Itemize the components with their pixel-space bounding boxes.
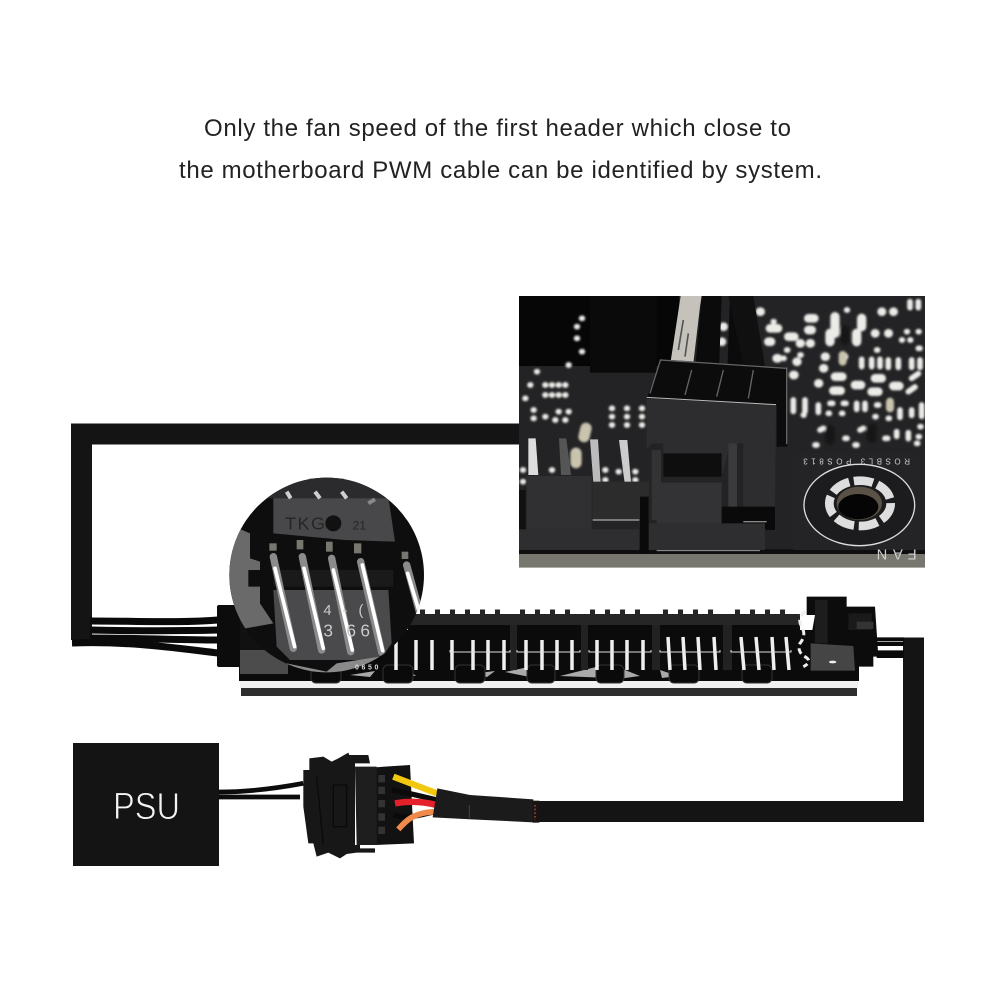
board: noise base strip: [241, 687, 857, 696]
plug grey face: [811, 643, 855, 671]
lens: board text: 4-(: [323, 603, 363, 619]
board: header outline marks: [450, 650, 791, 652]
title: [179, 115, 822, 184]
board: white edge strip: [240, 680, 858, 688]
wires to PSU: [219, 783, 303, 797]
cable: motherboard to hub: [82, 434, 519, 640]
lens: pin shoulders: [269, 540, 408, 559]
board: bottom tabs: [311, 665, 772, 683]
lens: connector top: [273, 497, 395, 542]
magnified header lens: [227, 477, 427, 677]
PSU box: [73, 743, 219, 866]
yellow wire: [393, 777, 437, 793]
title: the motherboard PWM cable can be identified by system.: [179, 157, 822, 184]
connector: left fan header: [519, 476, 649, 550]
lens: board text: [324, 604, 370, 636]
pcb components: [523, 302, 922, 482]
board: silver solder patches: [350, 666, 678, 679]
red wire: [395, 802, 437, 805]
lens: header markings: 21: [353, 518, 366, 532]
pcb silk labels: FAN: [877, 545, 917, 561]
board: header shrouds and teeth: [408, 612, 800, 670]
wires: left 4-pin bundle: [72, 620, 218, 653]
lens: grey side wall: [229, 530, 274, 628]
plug wires: [877, 639, 904, 656]
photo: motherboard fan header: [519, 296, 925, 568]
connector: left plug on hub: [217, 605, 288, 674]
frayed cable end: [533, 801, 539, 823]
wires: fan connector: [670, 296, 765, 366]
connector comb: [375, 765, 414, 845]
solder curls: [799, 612, 809, 667]
lens: lower grey panel: [273, 590, 392, 660]
pcb silk labels: ROSBL3 POS813: [803, 456, 910, 465]
hub board: [239, 612, 859, 696]
connector body: [303, 753, 375, 858]
title: Only the fan speed of the first header which close to: [204, 115, 791, 142]
lens: header markings: TKG: [285, 513, 325, 533]
connector: main fan plug: [640, 359, 787, 553]
board: header pins: [396, 637, 789, 670]
mounting hole: [804, 464, 915, 546]
plug body: [807, 597, 878, 672]
black inner wires: [392, 790, 437, 817]
orange wire: [398, 812, 435, 829]
lens: label on board: 0650: [355, 664, 378, 671]
infographic canvas: [71, 118, 925, 866]
lens: metal pins: [273, 557, 422, 652]
lens: shaded pin channels: [273, 570, 393, 587]
heat shrink: [433, 788, 533, 822]
lens: top pins: [287, 492, 375, 503]
PSU box: PSU: [113, 786, 180, 828]
connector mid block: [355, 767, 377, 845]
pcb silk labels: [803, 456, 917, 561]
cable: hub to PSU connector: [535, 648, 914, 812]
lens: header markings: [286, 518, 366, 530]
board: black pcb: [239, 622, 859, 681]
connector: right power plug on hub: [799, 597, 904, 672]
PSU SATA connector and cable: [219, 753, 539, 858]
pins: left header: [528, 438, 631, 482]
lens: board text: 3 66: [323, 621, 370, 641]
